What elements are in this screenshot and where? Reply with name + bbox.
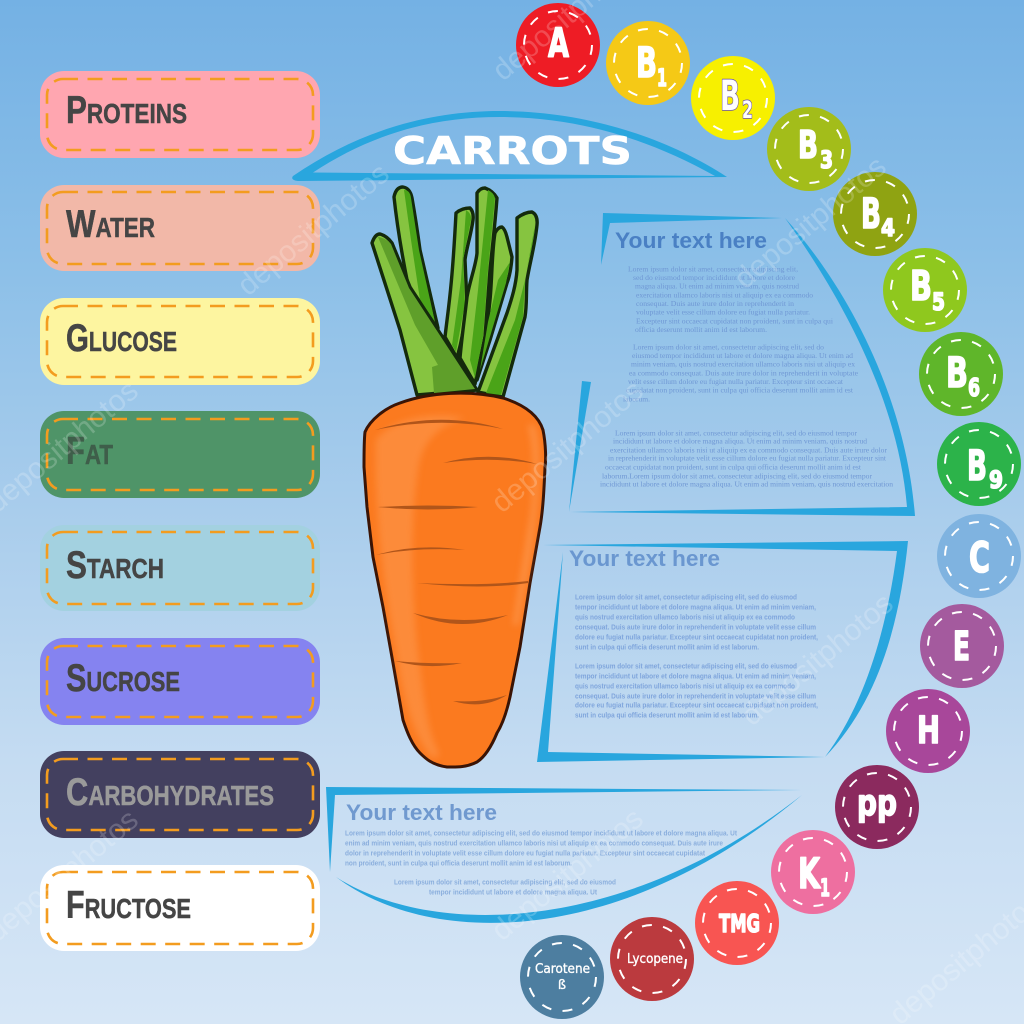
vitamin B3: B bbox=[798, 123, 818, 167]
vitamin B6 bbox=[919, 332, 1003, 416]
vitamin B6: B bbox=[946, 348, 968, 397]
carotene beta bbox=[520, 935, 604, 1019]
vitamin B2: 2 bbox=[742, 96, 753, 124]
vitamin E bbox=[920, 604, 1004, 688]
carrot root bbox=[364, 393, 546, 767]
panel 2 body text: sunt in culpa qui officia deserunt mollit anim id est laborum. bbox=[575, 710, 759, 720]
vitamin E: E bbox=[953, 624, 970, 670]
vitamin B9 bbox=[937, 422, 1021, 506]
vitamin A bbox=[516, 3, 600, 87]
vitamin B9: 9 bbox=[989, 466, 1003, 494]
panel 1 body text: sed do eiusmod tempor incididunt ut labore et dolore bbox=[633, 273, 796, 282]
panel 2 body text: dolore eu fugiat nulla pariatur. Excepteur sint occaecat cupidatat non proident, bbox=[575, 632, 818, 642]
panel 1 body text bbox=[600, 264, 893, 488]
panel 1 body text: voluptate velit esse cillum dolore eu fugiat nulla pariatur. bbox=[636, 308, 810, 316]
title banner bbox=[292, 111, 727, 181]
panel 2 body text bbox=[575, 592, 818, 720]
watermark: depositphotos bbox=[485, 374, 650, 519]
panel 3 body text: non proident, sunt in culpa qui officia deserunt mollit anim id est laborum. bbox=[345, 858, 572, 868]
lycopene: Lycopene bbox=[627, 952, 683, 967]
panel 2 body text: consequat. Duis aute irure dolor in reprehenderit in voluptate velit esse cillum bbox=[575, 692, 816, 700]
carrot illustration bbox=[364, 187, 546, 767]
panel 2 body text: quis nostrud exercitation ullamco laboris nisi ut aliquip ex ea commodo bbox=[575, 682, 796, 690]
panel 3 body text: Lorem ipsum dolor sit amet, consectetur adipiscing elit, sed do eiusmod bbox=[394, 878, 616, 886]
panel 2 heading: Your text here bbox=[569, 546, 720, 571]
panel 1 body text: cupidatat non proident, sunt in culpa qui officia deserunt mollit anim id est bbox=[626, 386, 854, 394]
vitamin B5 bbox=[883, 248, 967, 332]
carrot highlights bbox=[376, 415, 539, 758]
panel: text block 2 bbox=[537, 541, 908, 762]
vitamin B2 bbox=[691, 56, 775, 140]
watermark: depositphotos bbox=[728, 150, 893, 295]
vitamin B4: 4 bbox=[881, 214, 895, 242]
panel 3 body text: dolor in reprehenderit in voluptate velit esse cillum dolore eu fugiat nulla pariatur. Excepteur sint occaecat cupidatat bbox=[345, 848, 706, 858]
nutrient: proteins: PROTEINS bbox=[66, 89, 187, 132]
nutrient: water: WATER bbox=[66, 203, 155, 246]
nutrient: fructose bbox=[40, 865, 320, 951]
vitamin B6: 6 bbox=[968, 373, 980, 402]
panel 2 body text: tempor incididunt ut labore et dolore magna aliqua. Ut enim ad minim veniam, bbox=[575, 672, 816, 680]
panel 2 body text: sunt in culpa qui officia deserunt mollit anim id est laborum. bbox=[575, 642, 759, 652]
vitamin B5: 5 bbox=[932, 288, 945, 316]
panel 3 body text: Lorem ipsum dolor sit amet, consectetur adipiscing elit, sed do eiusmod tempor incididunt ut labore et dolore magna aliqua. Ut bbox=[345, 828, 738, 838]
nutrient: sucrose bbox=[40, 638, 320, 725]
nutrient: carbohydrates bbox=[40, 751, 320, 838]
panel 2 body text: dolore eu fugiat nulla pariatur. Excepteur sint occaecat cupidatat non proident, bbox=[575, 700, 818, 710]
panel 3 frame bbox=[326, 787, 802, 923]
panel 1 body text: velit esse cillum dolore eu fugiat nulla pariatur. Excepteur sint occaecat bbox=[628, 377, 844, 386]
panel 1 heading: Your text here bbox=[615, 228, 767, 253]
panel 2 body text: Lorem ipsum dolor sit amet, consectetur adipiscing elit, sed do eiusmod bbox=[575, 592, 797, 602]
vitamin B1: 1 bbox=[657, 64, 667, 92]
vitamin C bbox=[937, 514, 1021, 598]
panel 1 body text: exercitation ullamco laboris nisi ut aliquip ex ea commodo bbox=[636, 290, 813, 300]
vitamin H: H bbox=[917, 709, 940, 752]
TMG bbox=[695, 881, 779, 965]
vitamin B3 bbox=[767, 107, 851, 191]
vitamin B1 bbox=[606, 21, 690, 105]
title text: CARROTS bbox=[393, 129, 632, 173]
panel 1 body text: Lorem ipsum dolor sit amet, consectetur adipiscing elit, bbox=[628, 264, 798, 274]
panel 1 body text: magna aliqua. Ut enim ad minim veniam, quis nostrud bbox=[635, 282, 799, 290]
panel 1 body text: Excepteur sint occaecat cupidatat non proident, sunt in culpa qui bbox=[636, 316, 833, 326]
panel 2 body text: tempor incididunt ut labore et dolore magna aliqua. Ut enim ad minim veniam, bbox=[575, 602, 816, 612]
nutrient: fat bbox=[40, 411, 320, 498]
panel 3 heading: Your text here bbox=[346, 800, 497, 825]
panel 2 body text: Lorem ipsum dolor sit amet, consectetur adipiscing elit, sed do eiusmod bbox=[575, 662, 797, 670]
lycopene bbox=[610, 917, 694, 1001]
nutrient: fructose: FRUCTOSE bbox=[66, 884, 191, 927]
panel 1 body text: ea commodo consequat. Duis aute irure dolor in reprehenderit in voluptate bbox=[629, 368, 859, 378]
panel 1 body text: incididunt ut labore et dolore magna aliqua. Ut enim ad minim veniam, quis nostrud bbox=[613, 436, 867, 446]
vitamin K1: K bbox=[798, 849, 821, 898]
panel 1 body text: Lorem ipsum dolor sit amet, consectetur adipiscing elit, sed do eiusmod tempor bbox=[615, 428, 858, 438]
panel 1 body text: exercitation ullamco laboris nisi ut aliquip ex ea commodo consequat. Duis aute irure dolor bbox=[610, 446, 888, 454]
carotene beta: ß bbox=[558, 978, 566, 993]
panel 2 body text: consequat. Duis aute irure dolor in reprehenderit in voluptate velit esse cillum bbox=[575, 622, 816, 632]
vitamin circles bbox=[516, 3, 1021, 1019]
nutrient: carbohydrates: CARBOHYDRATES bbox=[66, 771, 274, 814]
panel 1 body text: incididunt ut labore et dolore magna aliqua. Ut enim ad minim veniam, quis nostrud exercitation bbox=[600, 480, 893, 488]
vitamin H bbox=[886, 689, 970, 773]
panel 1 body text: Lorem ipsum dolor sit amet, consectetur adipiscing elit, sed do bbox=[633, 342, 824, 352]
panel 1 body text: minim veniam, quis nostrud exercitation ullamco laboris nisi ut aliquip ex bbox=[631, 360, 855, 368]
TMG: TMG bbox=[719, 909, 760, 938]
panel 1 body text: occaecat cupidatat non proident, sunt in culpa qui officia deserunt mollit anim id est bbox=[605, 462, 862, 472]
vitamin B5: B bbox=[910, 262, 932, 310]
vitamin C: C bbox=[969, 533, 990, 582]
nutrient: sucrose: SUCROSE bbox=[66, 657, 180, 700]
watermark: depositphotos bbox=[231, 157, 396, 302]
panel 3 body text: enim ad minim veniam, quis nostrud exercitation ullamco laboris nisi ut aliquip ex ea commodo consequat. Duis aute irure bbox=[345, 838, 723, 848]
carrot leaves bbox=[372, 187, 537, 397]
carotene beta: Carotene bbox=[535, 961, 590, 977]
watermark: depositphotos bbox=[485, 802, 650, 947]
carrot grooves bbox=[375, 420, 537, 704]
vitamin K1: 1 bbox=[820, 874, 830, 902]
vitamin PP: pp bbox=[857, 783, 897, 824]
nutrient: proteins bbox=[40, 71, 320, 158]
panel 1 body text: consequat. Duis aute irure dolor in reprehenderit in bbox=[636, 299, 794, 308]
nutrient: glucose bbox=[40, 298, 320, 385]
panel 1 body text: eiusmod tempor incididunt ut labore et dolore magna aliqua. Ut enim ad bbox=[632, 351, 853, 360]
panel 3 body text bbox=[345, 828, 738, 896]
nutrient: fat: FAT bbox=[66, 430, 113, 473]
nutrient list bbox=[40, 71, 320, 951]
nutrient: glucose: GLUCOSE bbox=[66, 317, 177, 360]
panel 1 body text: in reprehenderit in voluptate velit esse cillum dolore eu fugiat nulla pariatur. Excepteur sint bbox=[608, 454, 887, 462]
panel: text block 1 bbox=[569, 213, 915, 516]
vitamin A: A bbox=[548, 21, 569, 67]
panel 1 body text: officia deserunt mollit anim id est laborum. bbox=[635, 325, 767, 334]
vitamin B4: B bbox=[861, 189, 881, 238]
panel 1 body text: laborum. bbox=[623, 394, 650, 404]
nutrient: starch bbox=[40, 525, 320, 611]
panel 2 frame bbox=[537, 541, 908, 762]
vitamin B9: B bbox=[967, 441, 987, 490]
watermark: depositphotos bbox=[735, 587, 900, 732]
nutrient: water bbox=[40, 185, 320, 271]
nutrient: starch: STARCH bbox=[66, 544, 164, 587]
panel 1 frame bbox=[569, 213, 915, 516]
panel 3 body text: tempor incididunt ut labore et dolore magna aliqua. Ut bbox=[429, 888, 598, 896]
vitamin B3: 3 bbox=[820, 146, 833, 174]
vitamin B2: B bbox=[720, 71, 740, 120]
panel 2 body text: quis nostrud exercitation ullamco laboris nisi ut aliquip ex ea commodo bbox=[575, 612, 796, 622]
vitamin B4 bbox=[833, 172, 917, 256]
vitamin B1: B bbox=[636, 38, 657, 87]
panel 1 body text: laborum.Lorem ipsum dolor sit amet, consectetur adipiscing elit, sed do eiusmod tempor bbox=[602, 472, 873, 480]
panel: text block 3 bbox=[326, 787, 802, 923]
vitamin PP bbox=[835, 765, 919, 849]
vitamin K1 bbox=[771, 830, 855, 914]
